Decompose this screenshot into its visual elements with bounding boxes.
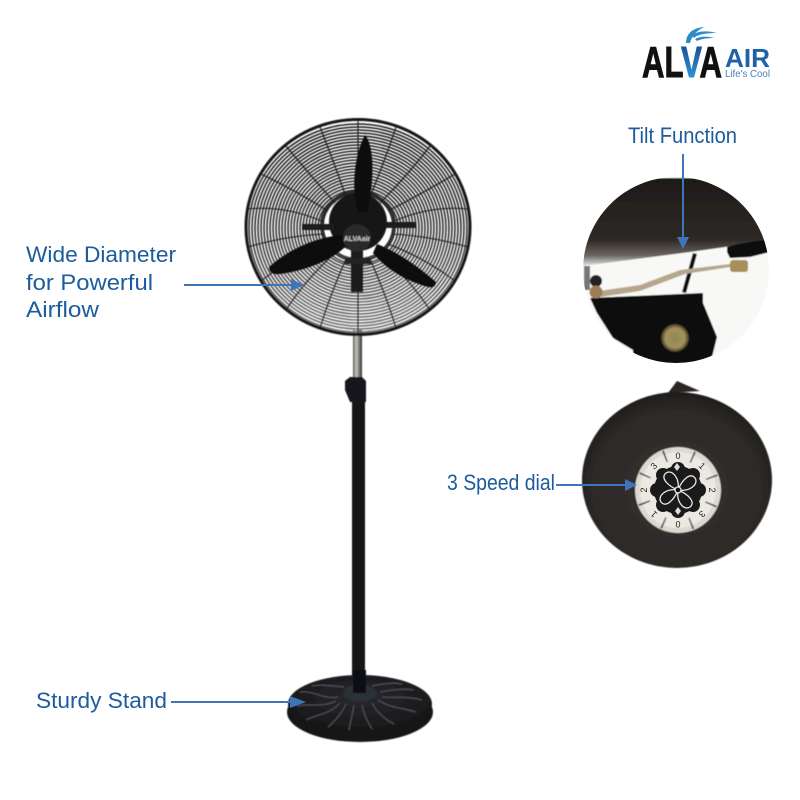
label: sturdy stand: Sturdy Stand <box>36 688 167 713</box>
label: 3 speed dial: 3 Speed dial <box>447 470 555 495</box>
logo: AlvaAir <box>642 27 770 87</box>
label: tilt function: Tilt Function <box>628 123 737 148</box>
fan guard radial wires <box>248 121 468 335</box>
arrow: sturdy stand <box>171 696 306 708</box>
fan hub cap with logo <box>343 224 371 252</box>
dial fan icon <box>660 463 696 515</box>
arrow: tilt function <box>677 154 689 249</box>
dial numbers: 1 <box>649 509 659 519</box>
stand fan product <box>246 120 470 742</box>
dial numbers: 2 <box>707 487 717 493</box>
dial numbers: 0 <box>675 451 681 461</box>
fan motor hub <box>302 193 416 292</box>
photo: 3 speed dial <box>582 381 772 568</box>
fan guard rings <box>249 124 467 332</box>
dial numbers: 3 <box>697 509 707 519</box>
arrow: wide diameter <box>184 279 304 291</box>
logo wordmark ALVA: ALVA <box>642 38 722 87</box>
label: wide diameter <box>26 242 176 322</box>
fan guard outer rim <box>246 120 470 334</box>
logo tagline: Life's Cool <box>725 69 770 80</box>
logo swoosh <box>686 27 717 43</box>
label: wide diameter: for Powerful <box>26 270 153 295</box>
fan blades <box>269 135 436 287</box>
label: wide diameter: Wide Diameter <box>26 242 176 267</box>
dial numbers: 2 <box>639 487 649 493</box>
dial numbers: 3 <box>649 461 659 471</box>
dial numbers: 0 <box>675 519 681 529</box>
dial numbers: 1 <box>697 461 707 471</box>
fan hub cap with logo: ALVAair <box>344 236 371 243</box>
label: wide diameter: Airflow <box>26 297 99 322</box>
dial knob <box>650 462 706 518</box>
photo: tilt function <box>580 175 775 365</box>
fan pole <box>345 330 366 683</box>
dial numbers <box>639 451 717 529</box>
fan base <box>287 670 433 742</box>
arrow: 3 speed dial <box>556 479 637 491</box>
logo wordmark AIR: AIR <box>725 43 770 73</box>
